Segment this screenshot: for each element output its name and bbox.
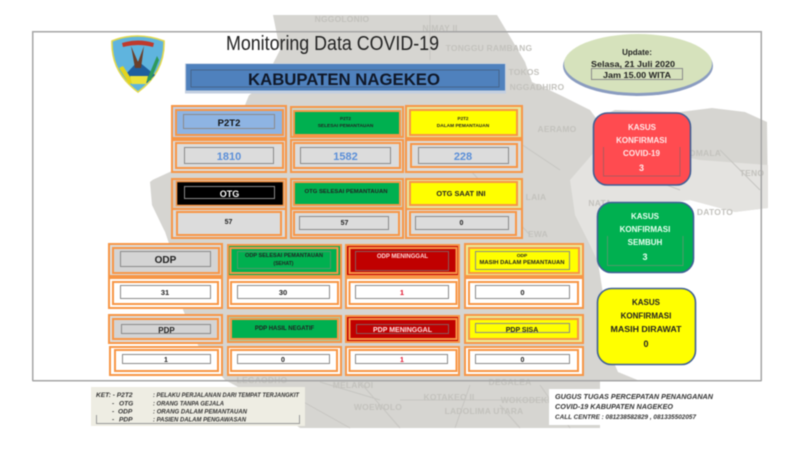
background map: DEGALEA [489,377,531,387]
background map: MELAKOI [333,380,373,390]
update date ellipse: Jam 15.00 WITA [603,71,671,80]
card: kasus konfirmasi masih dirawat: KASUS [632,298,661,307]
background map: DATOTO [697,207,733,217]
panel: P2T2 selesai pemantauan header: SELESAI PEMANTAUAN [318,123,374,129]
legend: keterangan [91,387,305,426]
title: Monitoring Data COVID-19 [226,33,439,55]
legend: keterangan: : ORANG DALAM PEMANTAUAN [153,408,247,416]
panel: P2T2 selesai pemantauan header [291,107,403,137]
panel: ODP selesai value: 30 [279,288,287,297]
footer: task force contact: GUGUS TUGAS PERCEPATAN PENANGANAN [555,392,714,401]
background map: LAIA [526,192,546,202]
panel: P2T2 total value [172,140,286,172]
panel: P2T2 dalam pemantauan header: P2T2 [458,116,469,121]
update date ellipse: Update: [622,48,652,57]
legend: keterangan: : PELAKU PERJALANAN DARI TEMPAT TERJANGKIT [153,392,300,399]
panel: PDP hasil negatif header [228,316,341,342]
panel: OTG total value [172,209,286,238]
legend: keterangan: - [112,408,114,416]
panel: P2T2 selesai pemantauan header: P2T2 [340,116,351,121]
panel: P2T2 dalam pemantauan value [406,140,522,172]
card: kasus konfirmasi sembuh: SEMBUH [628,238,663,247]
card: kasus konfirmasi COVID-19: KONFIRMASI [616,136,667,145]
panel: ODP meninggal header: ODP MENINGGAL [377,254,428,260]
panel: ODP meninggal value: 1 [400,288,404,297]
background map: NATA [588,198,612,208]
background map: NGGADHIRO [510,82,565,92]
icon: Nagekeo coat of arms [112,36,164,92]
panel: PDP total value: 1 [164,357,168,364]
panel: ODP meninggal value [346,278,459,308]
panel: PDP sisa header [465,315,583,343]
footer: task force contact: CALL CENTRE : 081238582829 , 081335502057 [555,414,696,421]
panel: PDP header [109,315,222,343]
panel: ODP header [109,244,222,276]
legend: keterangan: PDP [119,416,133,424]
panel: ODP header: ODP [155,255,177,266]
panel: PDP meninggal header [346,316,459,342]
panel: OTG header: OTG [220,189,239,199]
update date ellipse: Selasa, 21 Juli 2020 [591,60,676,69]
background map: OMALA [689,148,721,158]
panel: PDP sisa value: 0 [521,357,525,364]
panel: ODP masih dalam pemantauan value: 0 [520,288,525,297]
card: kasus konfirmasi sembuh: KASUS [631,212,660,221]
legend: keterangan: KET: - P2T2 [96,392,133,399]
background map: LEGAODHO [237,375,288,385]
panel: ODP selesai pemantauan header: (SEHAT) [274,261,294,267]
panel: ODP total value [109,278,222,308]
panel: OTG header [172,179,286,209]
panel: ODP masih dalam pemantauan header: ODP [517,253,528,259]
panel: OTG saat ini value [406,209,522,238]
background map: TENO [740,168,764,178]
background map: NGGOLONIO [315,14,370,24]
card: kasus konfirmasi masih dirawat: 0 [643,339,649,349]
panel: OTG selesai pemantauan header: OTG SELESAI PEMANTAUAN [304,189,388,195]
panel: OTG saat ini header [406,179,522,209]
background map [148,14,768,428]
panel: P2T2 dalam pemantauan header [406,106,522,138]
panel: PDP sisa value [465,347,583,375]
panel: P2T2 selesai value [291,140,403,172]
card: kasus konfirmasi masih dirawat: KONFIRMASI [621,312,671,320]
card: kasus konfirmasi COVID-19: 3 [639,163,644,173]
card: kasus konfirmasi COVID-19 [594,113,690,185]
card: kasus konfirmasi masih dirawat [598,288,696,364]
panel: PDP header: PDP [158,326,175,335]
panel: OTG selesai value: 57 [341,220,348,227]
background map: TOKOS [508,67,540,77]
panel: ODP selesai pemantauan header [228,245,341,276]
banner: Kabupaten Nagekeo [185,64,506,94]
panel: P2T2 selesai value: 1582 [333,151,358,163]
panel: PDP meninggal value: 1 [400,357,404,364]
card: kasus konfirmasi sembuh [598,202,694,272]
card: kasus konfirmasi masih dirawat: MASIH DIRAWAT [610,325,682,334]
legend: keterangan: ODP [118,408,133,416]
panel: PDP hasil negatif value [228,347,341,375]
background map: AERAMO [538,124,577,134]
panel: P2T2 header: P2T2 [218,118,240,129]
panel: OTG saat ini header: OTG SAAT INI [436,189,486,198]
card: kasus konfirmasi sembuh: KONFIRMASI [620,225,670,234]
card: kasus konfirmasi COVID-19: KASUS [628,123,657,132]
banner: Kabupaten Nagekeo: KABUPATEN NAGEKEO [248,70,440,89]
footer: task force contact: COVID-19 KABUPATEN NAGEKEO [555,402,673,411]
panel: PDP sisa header: PDP SISA [506,327,538,334]
background map: LADOLIMA UTARA [445,406,523,416]
panel: P2T2 total value: 1810 [217,151,241,163]
background map: TONGGU RAMBANG [446,43,533,53]
panel: P2T2 dalam pemantauan header: DALAM PEMANTAUAN [437,123,490,129]
background map: KOTAKEO II [424,392,474,402]
panel: OTG selesai value [291,209,403,238]
legend: keterangan: OTG [119,400,133,408]
panel: PDP meninggal value [346,347,459,375]
panel: ODP total value: 31 [161,288,169,297]
legend: keterangan: - [112,416,114,424]
panel: PDP hasil negatif value: 0 [281,357,285,364]
report frame [32,32,762,381]
panel: PDP meninggal header: PDP MENINGGAL [373,327,433,334]
panel: OTG saat ini value: 0 [460,220,464,227]
panel: ODP meninggal header [346,245,459,276]
panel: ODP masih dalam pemantauan header: MASIH DALAM PEMANTAUAN [480,260,565,266]
update date ellipse [563,34,713,96]
panel: ODP selesai value [228,278,341,308]
panel: OTG total value: 57 [225,219,232,226]
legend: keterangan: : ORANG TANPA GEJALA [153,400,224,408]
panel: ODP masih dalam pemantauan header [465,244,583,276]
background map: EWA [528,229,548,239]
panel: ODP selesai pemantauan header: ODP SELESAI PEMANTAUAN [245,253,323,259]
panel: PDP total value [110,347,222,375]
background map: WOEWOLO [354,402,402,412]
background map: WOKODEKE [501,395,553,405]
panel: PDP hasil negatif header: PDP HASIL NEGATIF [255,326,315,332]
panel: P2T2 dalam pemantauan value: 228 [454,151,472,163]
panel: OTG selesai pemantauan header [291,179,403,208]
card: kasus konfirmasi COVID-19: COVID-19 [623,149,660,158]
footer: task force contact [549,389,719,425]
legend: keterangan: - [112,400,114,408]
panel: ODP masih dalam pemantauan value [465,278,583,308]
panel: P2T2 header [172,106,286,138]
legend: keterangan: : PASIEN DALAM PENGAWASAN [153,416,246,424]
card: kasus konfirmasi sembuh: 3 [642,252,648,262]
background map: NIMAY II [422,23,458,33]
